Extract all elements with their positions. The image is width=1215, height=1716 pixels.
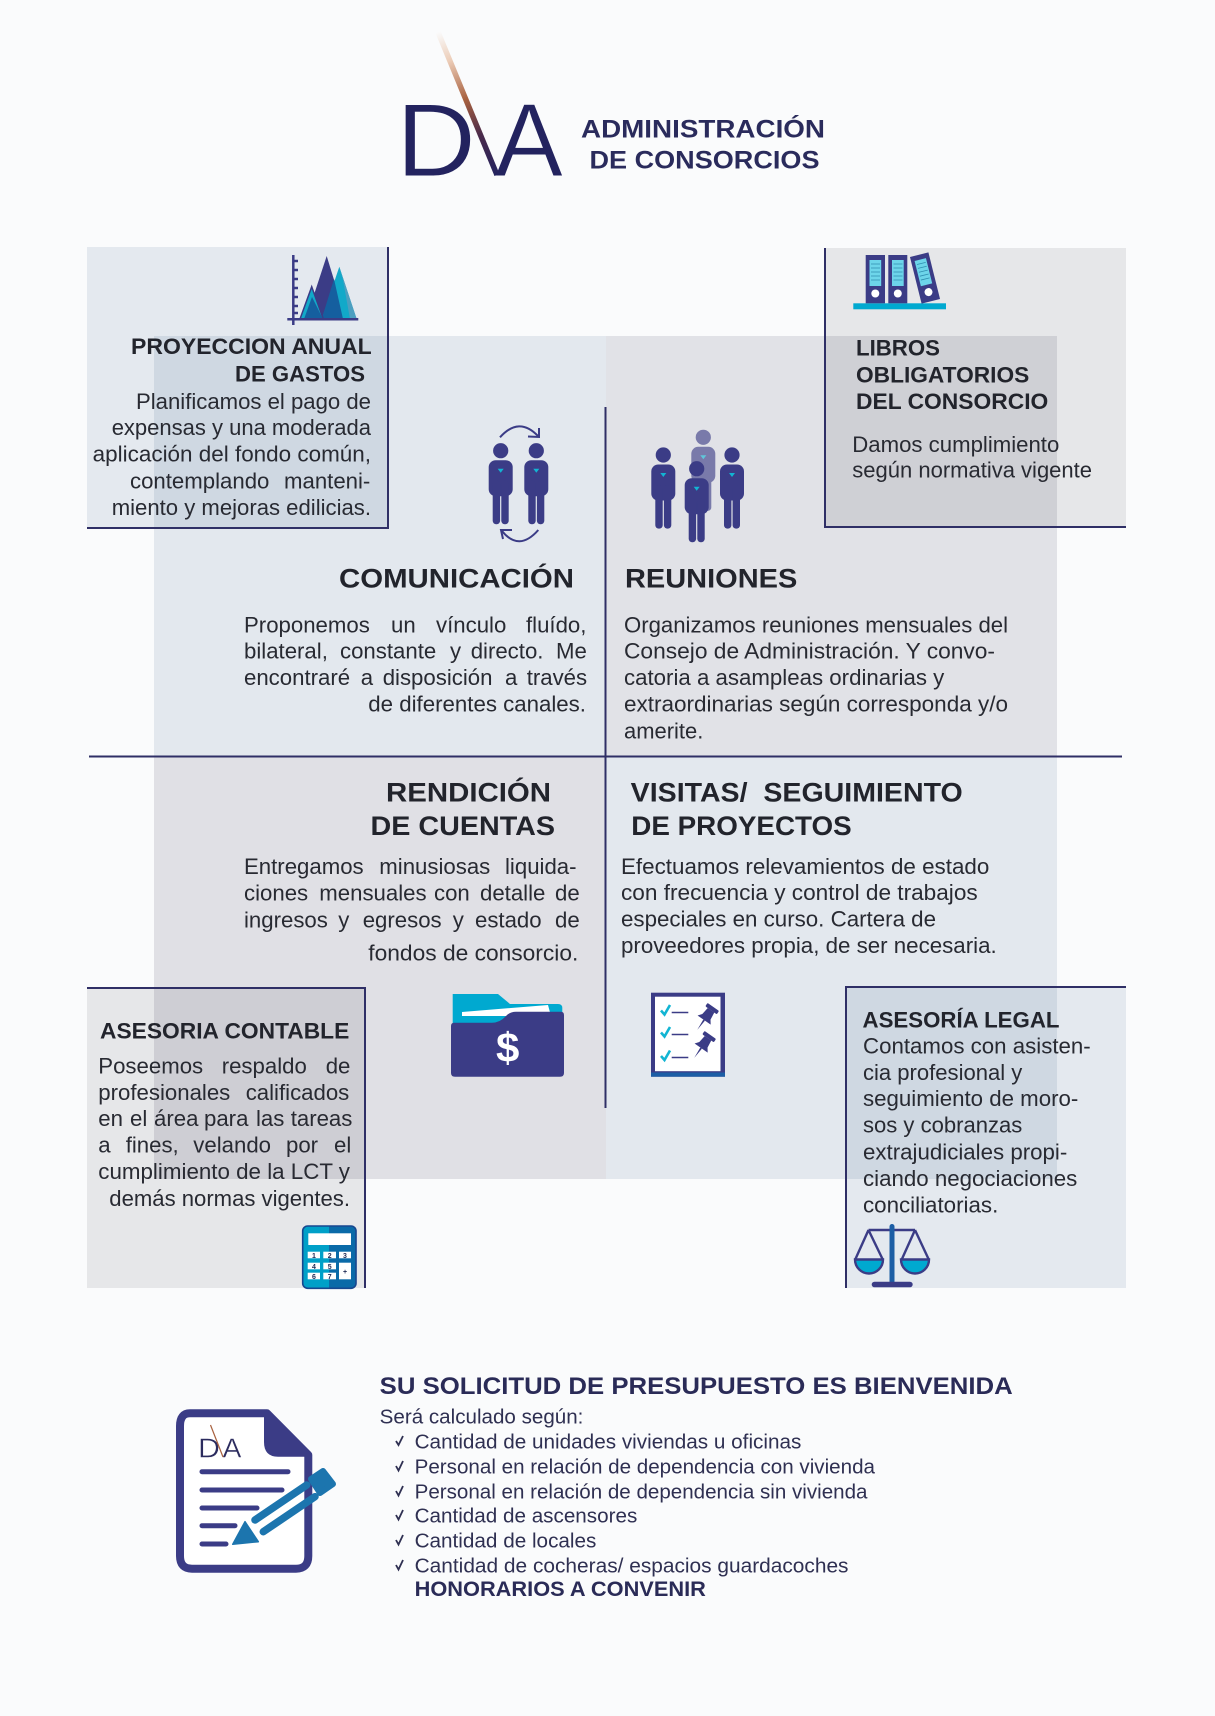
text: honorarios: HONORARIOS A CONVENIR bbox=[415, 1578, 706, 1601]
panel: libros obligatorios bbox=[825, 248, 1126, 527]
mini logo: D bbox=[198, 1432, 220, 1463]
checklist of criteria: Cantidad de unidades viviendas u oficinas bbox=[415, 1430, 801, 1453]
icon: calculator: + bbox=[343, 1269, 347, 1276]
heading: proyeccion anual bbox=[131, 334, 372, 386]
text: asesoria contable: área bbox=[154, 1106, 199, 1131]
text: asesoria contable: de bbox=[326, 1053, 350, 1078]
text: asesoria contable: Poseemos bbox=[98, 1053, 203, 1078]
heading: proyeccion anual: PROYECCION ANUAL bbox=[131, 334, 372, 359]
text: proyeccion anual: miento y mejoras edilicias. bbox=[112, 495, 371, 520]
text: rendición de cuentas: mensuales bbox=[319, 881, 427, 906]
icon: calculator: 3 bbox=[343, 1253, 347, 1260]
text: comunicación: Proponemos bbox=[244, 612, 370, 637]
text: comunicación: disposición bbox=[383, 665, 492, 690]
text: proyeccion anual: contemplando bbox=[130, 468, 269, 493]
logo mark DVA bbox=[396, 32, 564, 199]
panel: asesoria contable bbox=[87, 988, 365, 1288]
checklist of criteria bbox=[396, 1430, 876, 1577]
text: libros obligatorios: Damos cumplimiento bbox=[852, 432, 1059, 457]
text: comunicación: y bbox=[450, 638, 462, 663]
text: rendición de cuentas: de bbox=[555, 907, 580, 932]
panel: asesoría legal bbox=[846, 987, 1126, 1288]
section: solicitud de presupuesto bbox=[380, 1373, 1013, 1601]
text: rendición de cuentas: de bbox=[555, 881, 580, 906]
text: rendición de cuentas: fondos de consorcio. bbox=[368, 941, 578, 966]
icon: dollar folder bbox=[451, 994, 564, 1077]
logo tagline: ADMINISTRACIÓN bbox=[581, 113, 825, 143]
text: asesoria contable: a bbox=[98, 1133, 111, 1158]
text: comunicación: Me bbox=[556, 638, 587, 663]
text: asesoría legal: ciando negociaciones bbox=[863, 1166, 1077, 1191]
text: libros obligatorios: según normativa vigente bbox=[852, 458, 1092, 483]
header logo bbox=[396, 32, 825, 199]
text: visitas seguimiento: especiales en curso. Cartera de bbox=[621, 906, 936, 932]
text: rendición de cuentas: egresos bbox=[363, 907, 442, 932]
text: asesoria contable: el bbox=[334, 1133, 351, 1158]
icon: calculator: 5 bbox=[328, 1264, 332, 1271]
text: asesoría legal: extrajudiciales propi- bbox=[863, 1139, 1067, 1164]
icon: document with pencil bbox=[180, 1413, 333, 1569]
heading: libros obligatorios: DEL CONSORCIO bbox=[856, 389, 1048, 414]
checklist of criteria: Cantidad de cocheras/ espacios guardacoches bbox=[415, 1554, 848, 1577]
text: rendición de cuentas: Entregamos bbox=[244, 854, 364, 879]
text: rendición de cuentas: ciones bbox=[244, 881, 308, 906]
text: reuniones bbox=[624, 612, 1008, 743]
text: comunicación: constante bbox=[340, 638, 436, 663]
heading: asesoria contable: ASESORIA CONTABLE bbox=[100, 1019, 349, 1044]
icon: dollar folder: $ bbox=[496, 1024, 519, 1071]
heading: solicitud de presupuesto: SU SOLICITUD DE PRESUPUESTO ES BIENVENIDA bbox=[380, 1373, 1013, 1400]
text: rendición de cuentas: y bbox=[453, 907, 465, 932]
text: comunicación: de diferentes canales. bbox=[368, 691, 586, 716]
text: comunicación bbox=[244, 612, 587, 716]
mini logo: A bbox=[222, 1432, 242, 1463]
text: rendición de cuentas: minusiosas bbox=[379, 854, 490, 879]
text: rendición de cuentas: ingresos bbox=[244, 907, 328, 932]
pencil bbox=[233, 1471, 333, 1544]
text: asesoria contable: tareas bbox=[291, 1106, 352, 1131]
icon: calculator bbox=[303, 1226, 356, 1288]
text: comunicación: bilateral, bbox=[244, 638, 328, 663]
heading: rendición de cuentas: DE CUENTAS bbox=[370, 811, 555, 841]
text: proyeccion anual bbox=[93, 389, 372, 520]
text: asesoria contable: fines, bbox=[126, 1133, 179, 1158]
text: asesoría legal: Contamos con asisten- bbox=[863, 1033, 1091, 1058]
text: rendición de cuentas: y bbox=[338, 907, 350, 932]
text: rendición de cuentas: liquida- bbox=[505, 854, 577, 879]
icon: calculator: 4 bbox=[312, 1264, 316, 1271]
heading: asesoría legal: ASESORÍA LEGAL bbox=[862, 1007, 1060, 1032]
text: asesoria contable: velando bbox=[193, 1133, 271, 1158]
text: comunicación: un bbox=[391, 612, 416, 637]
checklist of criteria: Personal en relación de dependencia sin vivienda bbox=[415, 1480, 868, 1503]
text: asesoría legal: sos y cobranzas bbox=[863, 1113, 1022, 1138]
heading: proyeccion anual: DE GASTOS bbox=[235, 361, 365, 386]
icon: mountain chart bbox=[287, 255, 358, 325]
text: proyeccion anual: aplicación del fondo común, bbox=[93, 442, 371, 467]
text: rendición de cuentas: estado bbox=[475, 907, 542, 932]
text: reuniones: amerite. bbox=[624, 718, 703, 743]
heading: visitas seguimiento bbox=[631, 778, 963, 841]
icon: calculator: 6 bbox=[312, 1274, 316, 1281]
text: asesoria contable bbox=[98, 1053, 352, 1211]
icon: calculator: 2 bbox=[328, 1253, 332, 1260]
checklist of criteria: Cantidad de ascensores bbox=[415, 1504, 637, 1527]
text: asesoria contable: por bbox=[286, 1133, 319, 1158]
logo tagline: DE CONSORCIOS bbox=[590, 147, 820, 175]
panel: proyeccion anual de gastos bbox=[87, 247, 388, 528]
text: reuniones: catoria a asampleas ordinarias y bbox=[624, 665, 945, 690]
text: visitas seguimiento bbox=[621, 854, 997, 958]
icon: scales of justice bbox=[855, 1224, 929, 1287]
text: asesoria contable: cumplimiento de la LCT y bbox=[98, 1159, 351, 1184]
text: comunicación: vínculo bbox=[436, 612, 506, 637]
text: asesoría legal: cia profesional y bbox=[863, 1060, 1023, 1085]
text: asesoria contable: para bbox=[204, 1106, 249, 1131]
text: reuniones: Organizamos reuniones mensuales del bbox=[624, 612, 1008, 637]
icon: calculator: 1 bbox=[312, 1253, 316, 1260]
section: reuniones bbox=[624, 430, 1008, 743]
section: comunicación bbox=[244, 426, 587, 716]
heading: rendición de cuentas bbox=[370, 777, 555, 841]
heading: libros obligatorios bbox=[856, 336, 1048, 414]
logo mark DVA: D bbox=[396, 83, 476, 199]
text: proyeccion anual: Planificamos el pago de bbox=[136, 389, 371, 414]
text: asesoría legal bbox=[863, 1033, 1091, 1217]
section: rendición de cuentas bbox=[244, 777, 580, 1077]
text: intro: Será calculado según: bbox=[380, 1405, 583, 1428]
main divider lines bbox=[89, 407, 1122, 1108]
text: libros obligatorios bbox=[852, 432, 1092, 483]
text: comunicación: a bbox=[505, 665, 518, 690]
text: comunicación: directo. bbox=[471, 638, 543, 663]
text: asesoría legal: seguimiento de moro- bbox=[863, 1086, 1078, 1111]
heading: libros obligatorios: LIBROS bbox=[856, 336, 940, 361]
text: asesoria contable: las bbox=[256, 1106, 284, 1131]
text: rendición de cuentas: con bbox=[434, 881, 470, 906]
icon: two people exchanging bbox=[489, 426, 548, 541]
logo mark DVA: A bbox=[495, 83, 564, 199]
checklist of criteria: Personal en relación de dependencia con vivienda bbox=[415, 1455, 876, 1478]
text: asesoria contable: el bbox=[130, 1106, 147, 1131]
text: visitas seguimiento: proveedores propia, de ser necesaria. bbox=[621, 933, 997, 958]
section: visitas y seguimiento de proyectos bbox=[621, 778, 997, 1077]
text: visitas seguimiento: con frecuencia y control de trabajos bbox=[621, 880, 978, 905]
text: comunicación: encontraré bbox=[244, 665, 350, 690]
icon: checklist with pins bbox=[651, 993, 725, 1077]
text: reuniones: extraordinarias según corresponda y/o bbox=[624, 691, 1008, 716]
text: comunicación: a bbox=[361, 665, 374, 690]
mini logo bbox=[198, 1425, 242, 1463]
text: asesoria contable: calificados bbox=[246, 1080, 349, 1105]
icon: binders on shelf bbox=[853, 252, 946, 309]
heading: rendición de cuentas: RENDICIÓN bbox=[386, 777, 551, 808]
text: rendición de cuentas: detalle bbox=[480, 881, 545, 906]
logo tagline bbox=[581, 113, 825, 175]
icon: calculator: 7 bbox=[328, 1274, 332, 1281]
text: asesoria contable: profesionales bbox=[98, 1080, 230, 1105]
heading: comunicación: COMUNICACIÓN bbox=[339, 562, 574, 593]
text: proyeccion anual: manteni- bbox=[284, 468, 370, 493]
heading: libros obligatorios: OBLIGATORIOS bbox=[856, 363, 1029, 388]
text: proyeccion anual: expensas y una moderada bbox=[112, 415, 372, 440]
text: comunicación: fluído, bbox=[526, 612, 586, 637]
heading: reuniones: REUNIONES bbox=[625, 563, 797, 593]
text: reuniones: Consejo de Administración. Y convo- bbox=[624, 638, 995, 663]
text: asesoria contable: en bbox=[98, 1106, 123, 1131]
checklist of criteria: Cantidad de locales bbox=[415, 1529, 596, 1552]
text: visitas seguimiento: Efectuamos relevamientos de estado bbox=[621, 854, 989, 879]
heading: visitas seguimiento: DE PROYECTOS bbox=[631, 811, 852, 841]
text: comunicación: través bbox=[527, 665, 587, 690]
heading: visitas seguimiento: VISITAS/ SEGUIMIENTO bbox=[631, 778, 963, 808]
text: rendición de cuentas bbox=[244, 854, 580, 966]
text: asesoria contable: demás normas vigentes. bbox=[109, 1186, 350, 1211]
icon: group of people bbox=[651, 430, 744, 542]
text: asesoría legal: conciliatorias. bbox=[863, 1192, 998, 1217]
text: asesoria contable: respaldo bbox=[222, 1053, 307, 1078]
